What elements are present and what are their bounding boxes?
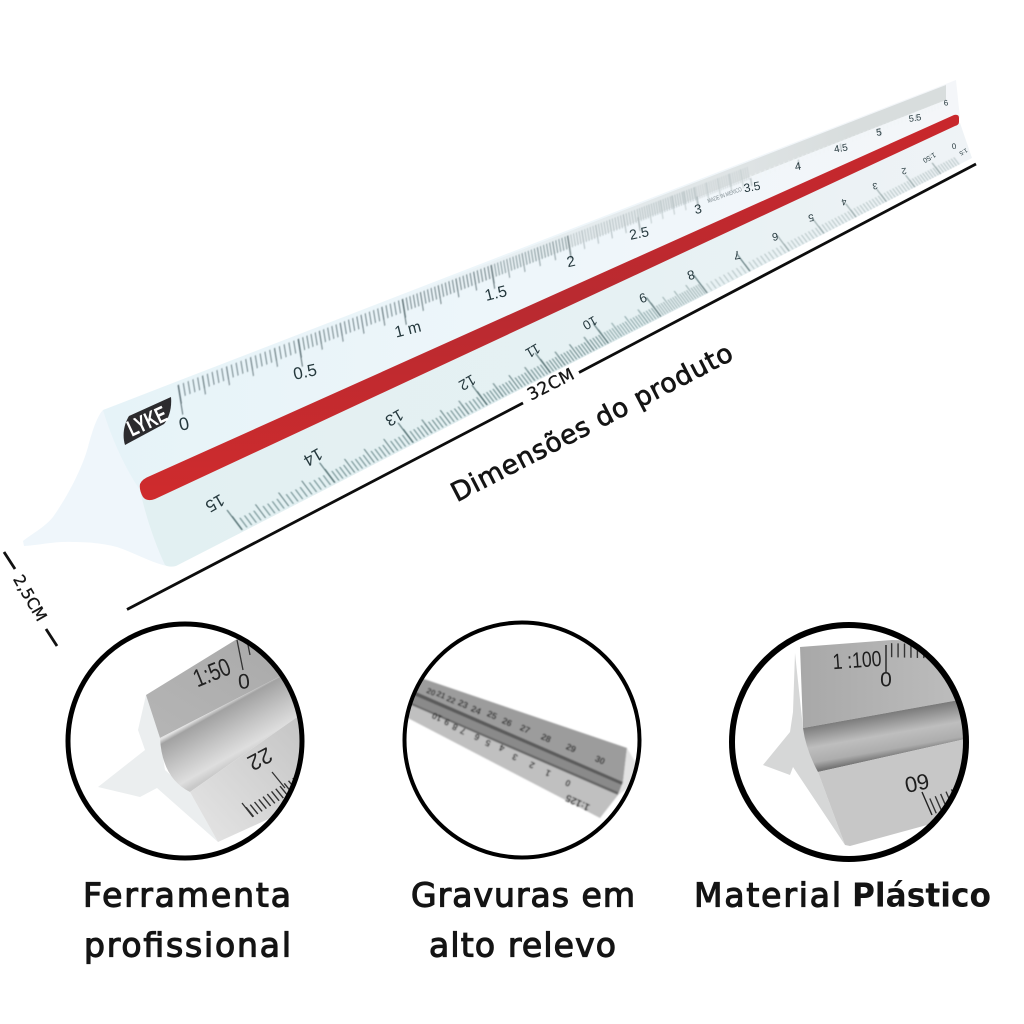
engraved numbers: 3 [511, 751, 519, 763]
lower scale numbers: 7 [732, 248, 742, 263]
upper scale numbers: 1 m [393, 319, 423, 341]
lower scale ticks [227, 144, 961, 530]
upper scale numbers: 4 [794, 161, 802, 173]
caption: Material Plástico: Plástico [852, 876, 991, 914]
upper scale numbers: 5 [875, 127, 883, 139]
scale text and ticks: 60 [902, 768, 932, 798]
end cap [763, 653, 845, 845]
lower scale numbers: 9 [637, 290, 649, 306]
groove [160, 676, 297, 792]
engraved numbers: 23 [456, 697, 470, 711]
upper scale numbers: 4.5 [833, 142, 849, 156]
scale text and ticks: 0 [237, 670, 251, 694]
caption: Ferramenta profissional [83, 876, 291, 964]
dimension marker: 2,5CM width: 2,5CM [9, 571, 51, 625]
upper scale numbers: 3.5 [743, 179, 762, 195]
caption: Material Plástico [694, 876, 991, 914]
engraved numbers: 20 [425, 686, 437, 698]
upper scale ticks [178, 91, 950, 415]
engraved numbers: 27 [518, 722, 532, 736]
engraved numbers: 25 [485, 708, 499, 722]
engraved numbers: 4 [498, 742, 506, 754]
engraved numbers: 2 [528, 759, 536, 771]
engraved numbers: 0 [564, 777, 572, 789]
ruler upper face [103, 80, 960, 490]
lower scale numbers: 3 [872, 181, 878, 191]
scale text and ticks [189, 640, 300, 817]
engraved numbers: 29 [564, 741, 578, 755]
upper scale numbers: MADE IN MEXICO [707, 187, 743, 205]
lower scale numbers: 5 [807, 211, 815, 223]
circle: plastic material detail [732, 625, 970, 859]
product: triangular scale ruler [23, 80, 972, 567]
scale text and ticks: 0 [880, 668, 892, 692]
ruler lower face [140, 123, 972, 567]
upper scale numbers [177, 98, 949, 435]
lower scale numbers: 13 [382, 405, 406, 429]
upper scale numbers: 5.5 [908, 112, 922, 124]
upper scale numbers: 3 [693, 201, 703, 217]
engraved numbers: 22 [445, 694, 457, 706]
upper scale numbers: 0 [177, 413, 191, 435]
engraved numbers: 8 [451, 721, 459, 733]
logo LYKE [123, 397, 171, 445]
caption: Ferramenta profissional: profissional [84, 926, 291, 964]
lower scale numbers: 14 [300, 444, 326, 470]
dimension line: 32CM length: 32CM [524, 365, 578, 405]
lower scale numbers: 12 [456, 370, 478, 394]
groove [803, 698, 970, 772]
engraved numbers [425, 686, 607, 812]
upper scale numbers: 1.5 [483, 283, 509, 305]
engraved numbers: 21 [435, 689, 447, 701]
lower face [190, 717, 300, 842]
caption: Gravuras em alto relevo: alto relevo [429, 926, 616, 964]
groove [412, 695, 622, 796]
lower scale numbers: 15 [202, 490, 228, 516]
lower scale numbers: 11 [523, 340, 543, 362]
caption: Gravuras em alto relevo [411, 876, 635, 964]
scale text and ticks [832, 645, 965, 815]
lower scale numbers [202, 141, 968, 516]
end cap [619, 749, 636, 794]
scale text and ticks: 1:50 [189, 653, 235, 693]
engraved numbers: 6 [473, 731, 481, 743]
top face [800, 640, 970, 728]
engraved numbers: 26 [500, 715, 514, 729]
engraved numbers: 24 [469, 703, 483, 717]
lower scale numbers: 4 [841, 197, 847, 207]
engraved numbers: 9 [443, 716, 451, 728]
engraved numbers: 5 [484, 737, 492, 749]
top face [146, 639, 280, 738]
scale text and ticks: 1 :100 [832, 646, 882, 674]
caption: Ferramenta profissional: Ferramenta [83, 876, 291, 914]
dimension marker: 2,5CM width [4, 552, 57, 646]
lower face [818, 738, 970, 846]
ruler end cap [98, 695, 218, 842]
lower scale numbers: 10 [580, 313, 600, 333]
ruler end tip [23, 410, 190, 566]
lower scale numbers: 0 [950, 141, 957, 151]
lower scale numbers: 1:50 [921, 151, 937, 163]
engraved numbers: 28 [539, 731, 553, 745]
engraved numbers: 1:125 [564, 791, 592, 812]
circle: high-relief engravings detail [400, 622, 640, 858]
logo LYKE: LYKE [123, 401, 171, 441]
upper scale numbers: 6 [943, 98, 949, 108]
lower face [400, 700, 618, 818]
circle: professional tool detail [68, 624, 310, 858]
heading: Dimensões do produto: Dimensões do produto [446, 337, 738, 509]
caption: Gravuras em alto relevo: Gravuras em [411, 876, 635, 914]
top face [416, 678, 628, 782]
grey top strip of upper scale [380, 85, 946, 322]
lower scale numbers: 2 [901, 166, 907, 176]
lower scale numbers: 1:5 [957, 146, 968, 156]
upper scale numbers: 2 [565, 253, 577, 271]
caption: Material Plástico: Material [694, 876, 841, 914]
red central band [140, 115, 959, 500]
engraved numbers: 7 [459, 725, 467, 737]
engraved numbers: 30 [593, 753, 607, 767]
engraved numbers: 10 [430, 710, 444, 724]
lower scale numbers: 6 [771, 230, 779, 242]
upper scale numbers: 2.5 [628, 223, 650, 243]
upper scale numbers: 0.5 [291, 360, 319, 384]
lower scale numbers: 8 [686, 267, 696, 283]
engraved numbers: 1 [544, 767, 552, 779]
scale text and ticks: 22 [243, 742, 277, 776]
